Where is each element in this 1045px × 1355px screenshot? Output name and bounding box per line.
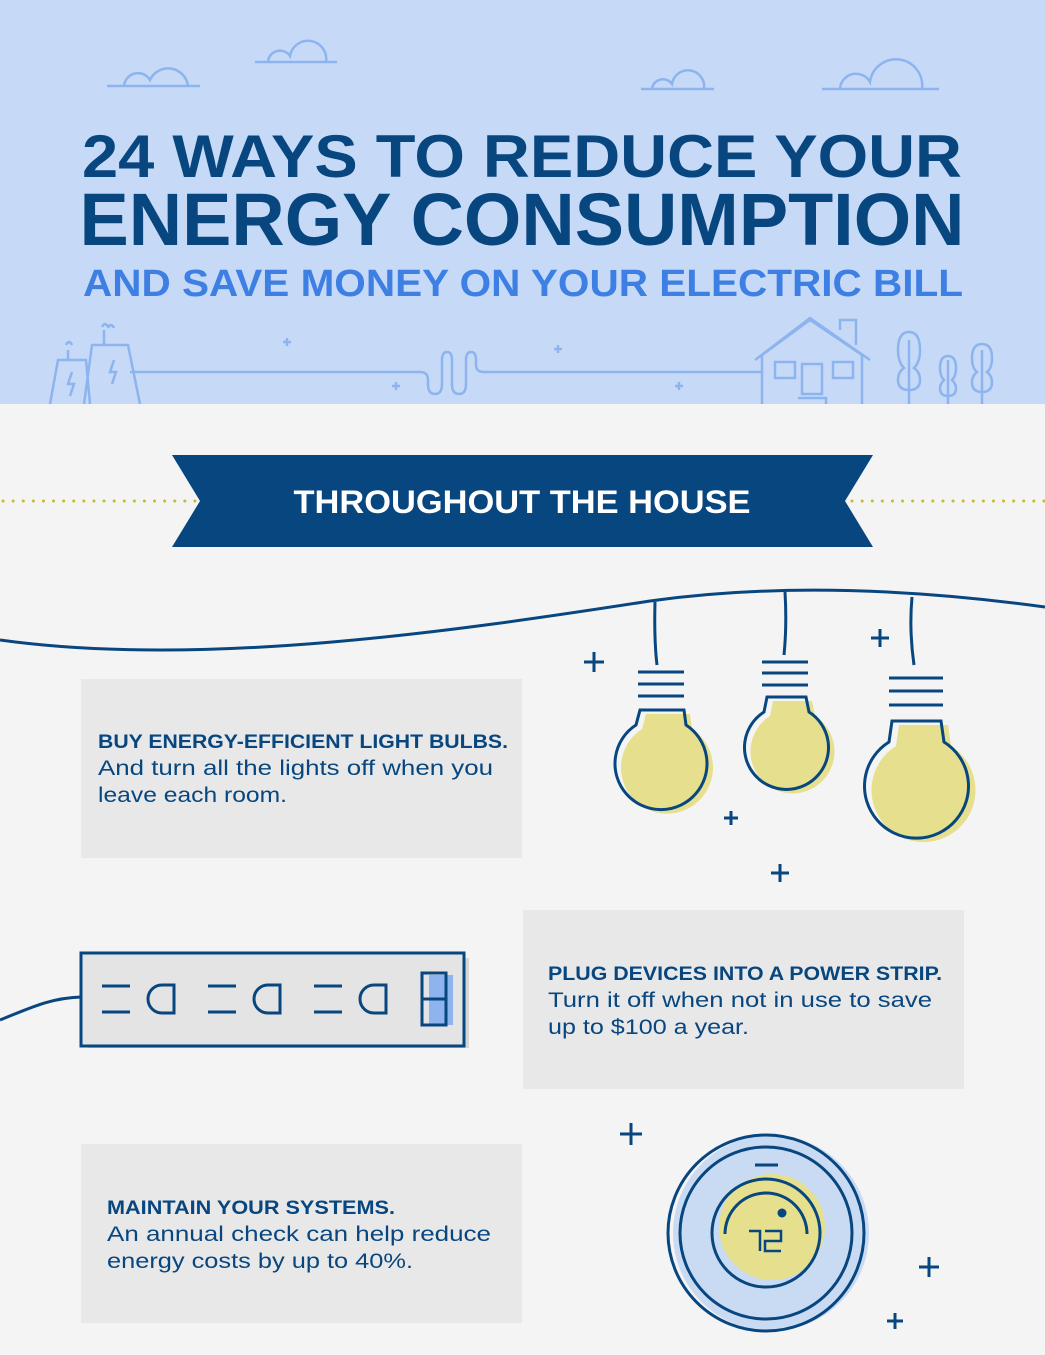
wire curve	[0, 590, 1045, 650]
text box: maintain systems: An annual check can help reduce	[107, 1223, 491, 1246]
text box: light bulbs: BUY ENERGY-EFFICIENT LIGHT BULBS.	[98, 732, 508, 753]
header decorations: clouds	[107, 41, 939, 89]
header decorations: power plant to house line	[50, 318, 992, 404]
header background	[0, 0, 1045, 404]
title: ENERGY CONSUMPTION	[80, 178, 964, 261]
subtitle: AND SAVE MONEY ON YOUR ELECTRIC BILL	[83, 263, 963, 305]
text box: maintain systems	[81, 1144, 522, 1323]
icon: light bulbs	[615, 592, 976, 842]
text box: power strip: Turn it off when not in use to save	[548, 989, 932, 1012]
text box: maintain systems: MAINTAIN YOUR SYSTEMS.	[107, 1198, 395, 1219]
plus signs	[584, 629, 939, 1329]
text box: power strip: up to $100 a year.	[548, 1016, 749, 1039]
text box: light bulbs	[81, 679, 522, 858]
text box: maintain systems: energy costs by up to 40%.	[107, 1250, 413, 1273]
text box: light bulbs: And turn all the lights off when you	[98, 757, 493, 780]
banner: throughout the house	[172, 455, 873, 547]
title	[80, 123, 964, 261]
dotted lines	[3, 500, 1045, 502]
text box: light bulbs: leave each room.	[98, 784, 287, 807]
title: 24 WAYS TO REDUCE YOUR	[82, 123, 962, 190]
icon: thermostat	[668, 1135, 869, 1331]
text box: power strip	[523, 910, 964, 1089]
text box: power strip: PLUG DEVICES INTO A POWER STRIP.	[548, 964, 942, 985]
banner: throughout the house: THROUGHOUT THE HOUSE	[294, 484, 750, 520]
icon: power strip	[0, 953, 469, 1048]
